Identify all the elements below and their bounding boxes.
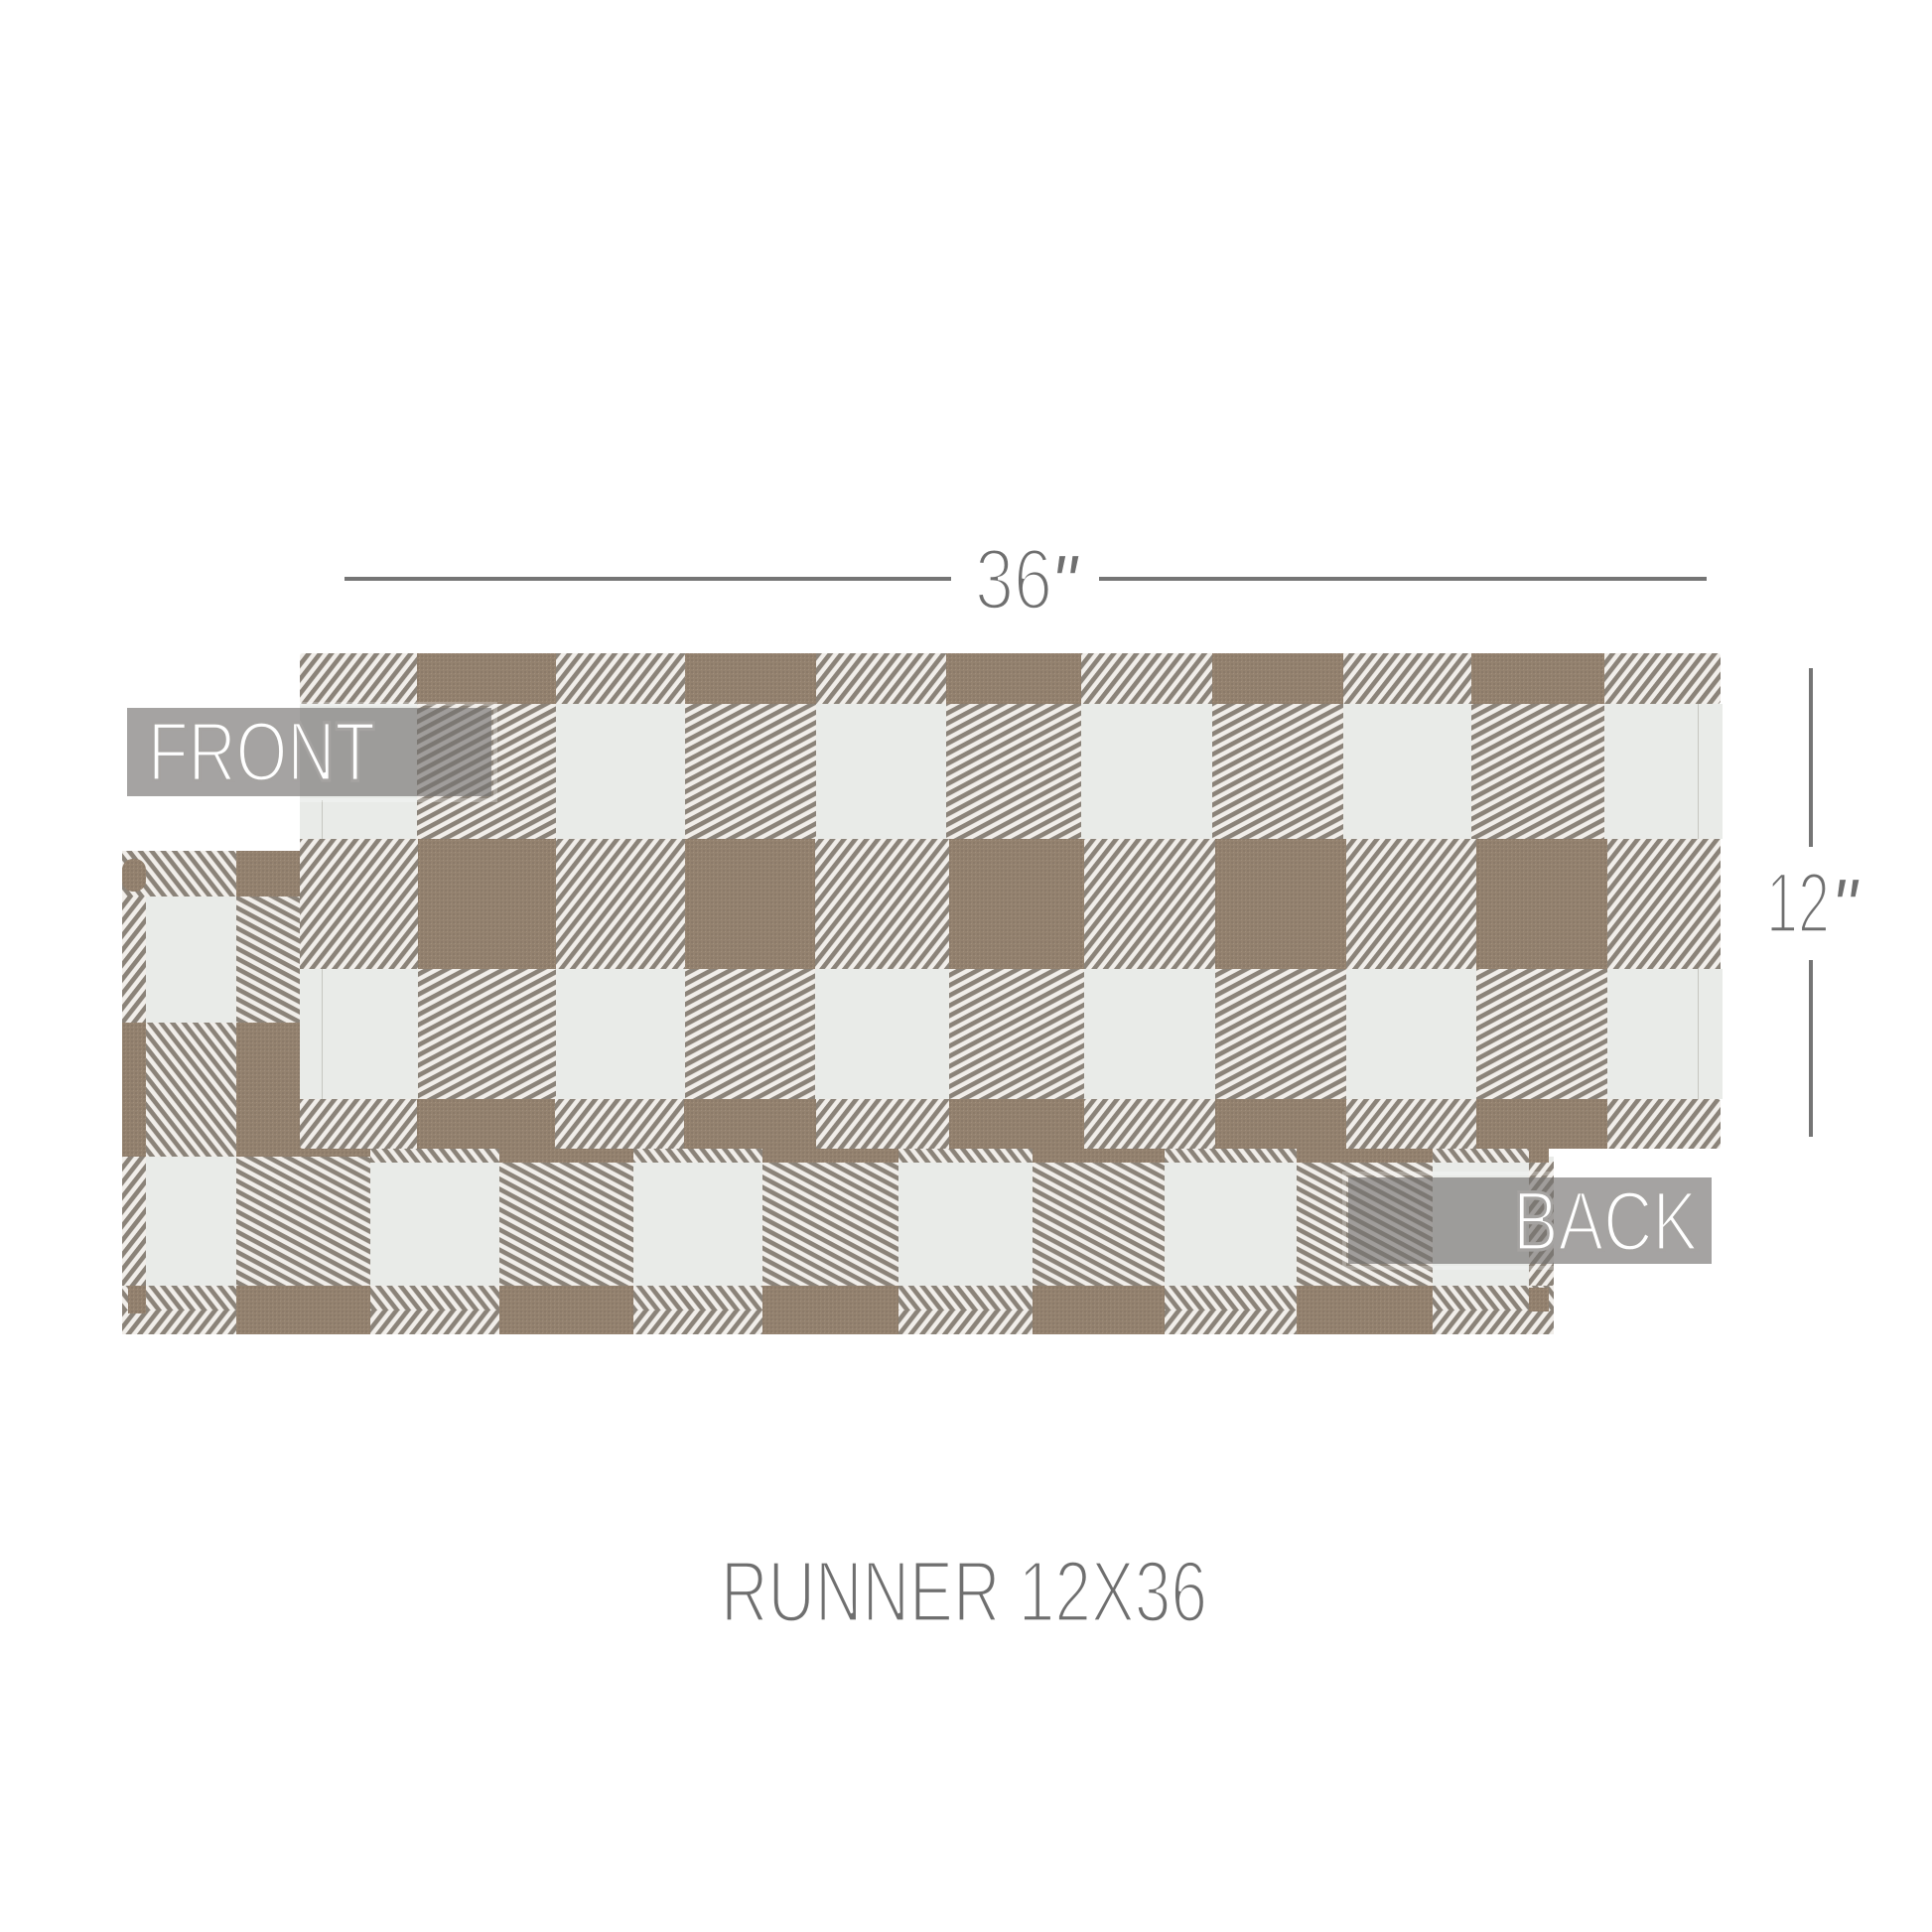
height dimension: 12 inches: ": [1831, 863, 1860, 953]
front runner: fourth row: [300, 969, 1723, 1099]
front runner: top row: [300, 653, 1721, 704]
caption: product size: RUNNER 12X36: [721, 1544, 1207, 1640]
label: BACK: [1344, 1173, 1716, 1268]
width dimension: 36 inches: ": [1050, 539, 1079, 629]
front runner: bottom row: [300, 1099, 1721, 1149]
back runner: strip under front edge: [370, 1147, 1549, 1163]
width dimension: 36 inches: [345, 532, 1707, 629]
label: FRONT: FRONT: [148, 705, 375, 798]
back runner fabric: [122, 851, 1554, 1334]
back runner: bottom hem row: [122, 1286, 1554, 1334]
height dimension: 12 inches: [1766, 668, 1860, 1137]
back runner: left column visible beside front: [122, 851, 370, 1157]
front runner: centre row with solid squares: [300, 839, 1721, 969]
label: BACK: BACK: [1513, 1174, 1698, 1268]
height dimension: 12 inches: 12: [1766, 856, 1830, 951]
back runner: white and twill row: [122, 1157, 1554, 1286]
width dimension: 36 inches: 36: [975, 532, 1052, 627]
front runner: second row: [300, 704, 1723, 839]
front runner fabric: [300, 653, 1723, 1149]
